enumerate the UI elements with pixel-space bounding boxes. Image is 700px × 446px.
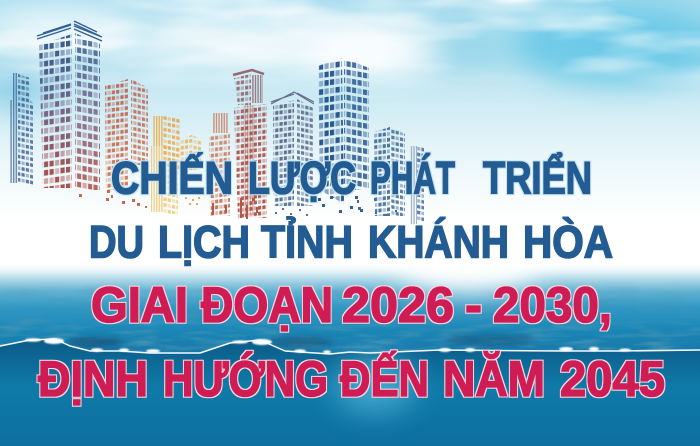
building: slim blue tower xyxy=(410,145,424,224)
building: far left tower xyxy=(10,73,33,187)
title line 2 xyxy=(89,216,613,268)
city skyline xyxy=(10,21,424,224)
sky background xyxy=(0,0,700,274)
waterline foam xyxy=(0,338,700,354)
title line 4: NĂM xyxy=(443,351,545,407)
building: salmon tower xyxy=(209,113,230,216)
title line 2: KHÁNH xyxy=(368,216,509,268)
title line 2: LỊCH xyxy=(158,216,250,268)
title line 4: ĐỊNH xyxy=(38,351,148,407)
building: small yellow block xyxy=(180,135,202,170)
building: small blue tower xyxy=(374,127,405,216)
title line 3: GIAI xyxy=(91,277,188,333)
title line 4: HƯỚNG xyxy=(163,351,328,407)
title line 1: TRIỂN xyxy=(483,152,592,204)
building: tall navy and red tower xyxy=(37,21,102,190)
underwater xyxy=(0,339,700,446)
title xyxy=(38,152,665,407)
title line 3: ĐOẠN xyxy=(201,277,333,333)
clouds xyxy=(0,0,700,90)
building: blue tower xyxy=(318,58,369,204)
title line 1: CHIẾN xyxy=(111,152,233,204)
title line 1: LƯỢC xyxy=(248,152,356,204)
building: red tower xyxy=(233,70,267,218)
title line 2: DU xyxy=(89,216,144,268)
title line 3 xyxy=(91,277,612,333)
title line 4: ĐẾN xyxy=(340,351,429,407)
title line 2: TỈNH xyxy=(261,216,353,268)
title line 2: HÒA xyxy=(523,216,613,268)
title line 1 xyxy=(111,152,592,204)
title line 4: 2045 xyxy=(560,351,665,407)
building: yellow tower xyxy=(151,116,180,214)
title line 3: 2030, xyxy=(493,277,612,333)
building: orange tower xyxy=(105,79,148,190)
building: grey navy tower xyxy=(271,92,314,206)
title line 1: PHÁT xyxy=(370,152,455,204)
title line 4 xyxy=(38,351,665,407)
sea surface xyxy=(0,239,700,354)
title line 3: - xyxy=(465,277,482,333)
title line 3: 2026 xyxy=(342,277,454,333)
dissolving pixels xyxy=(79,190,397,219)
